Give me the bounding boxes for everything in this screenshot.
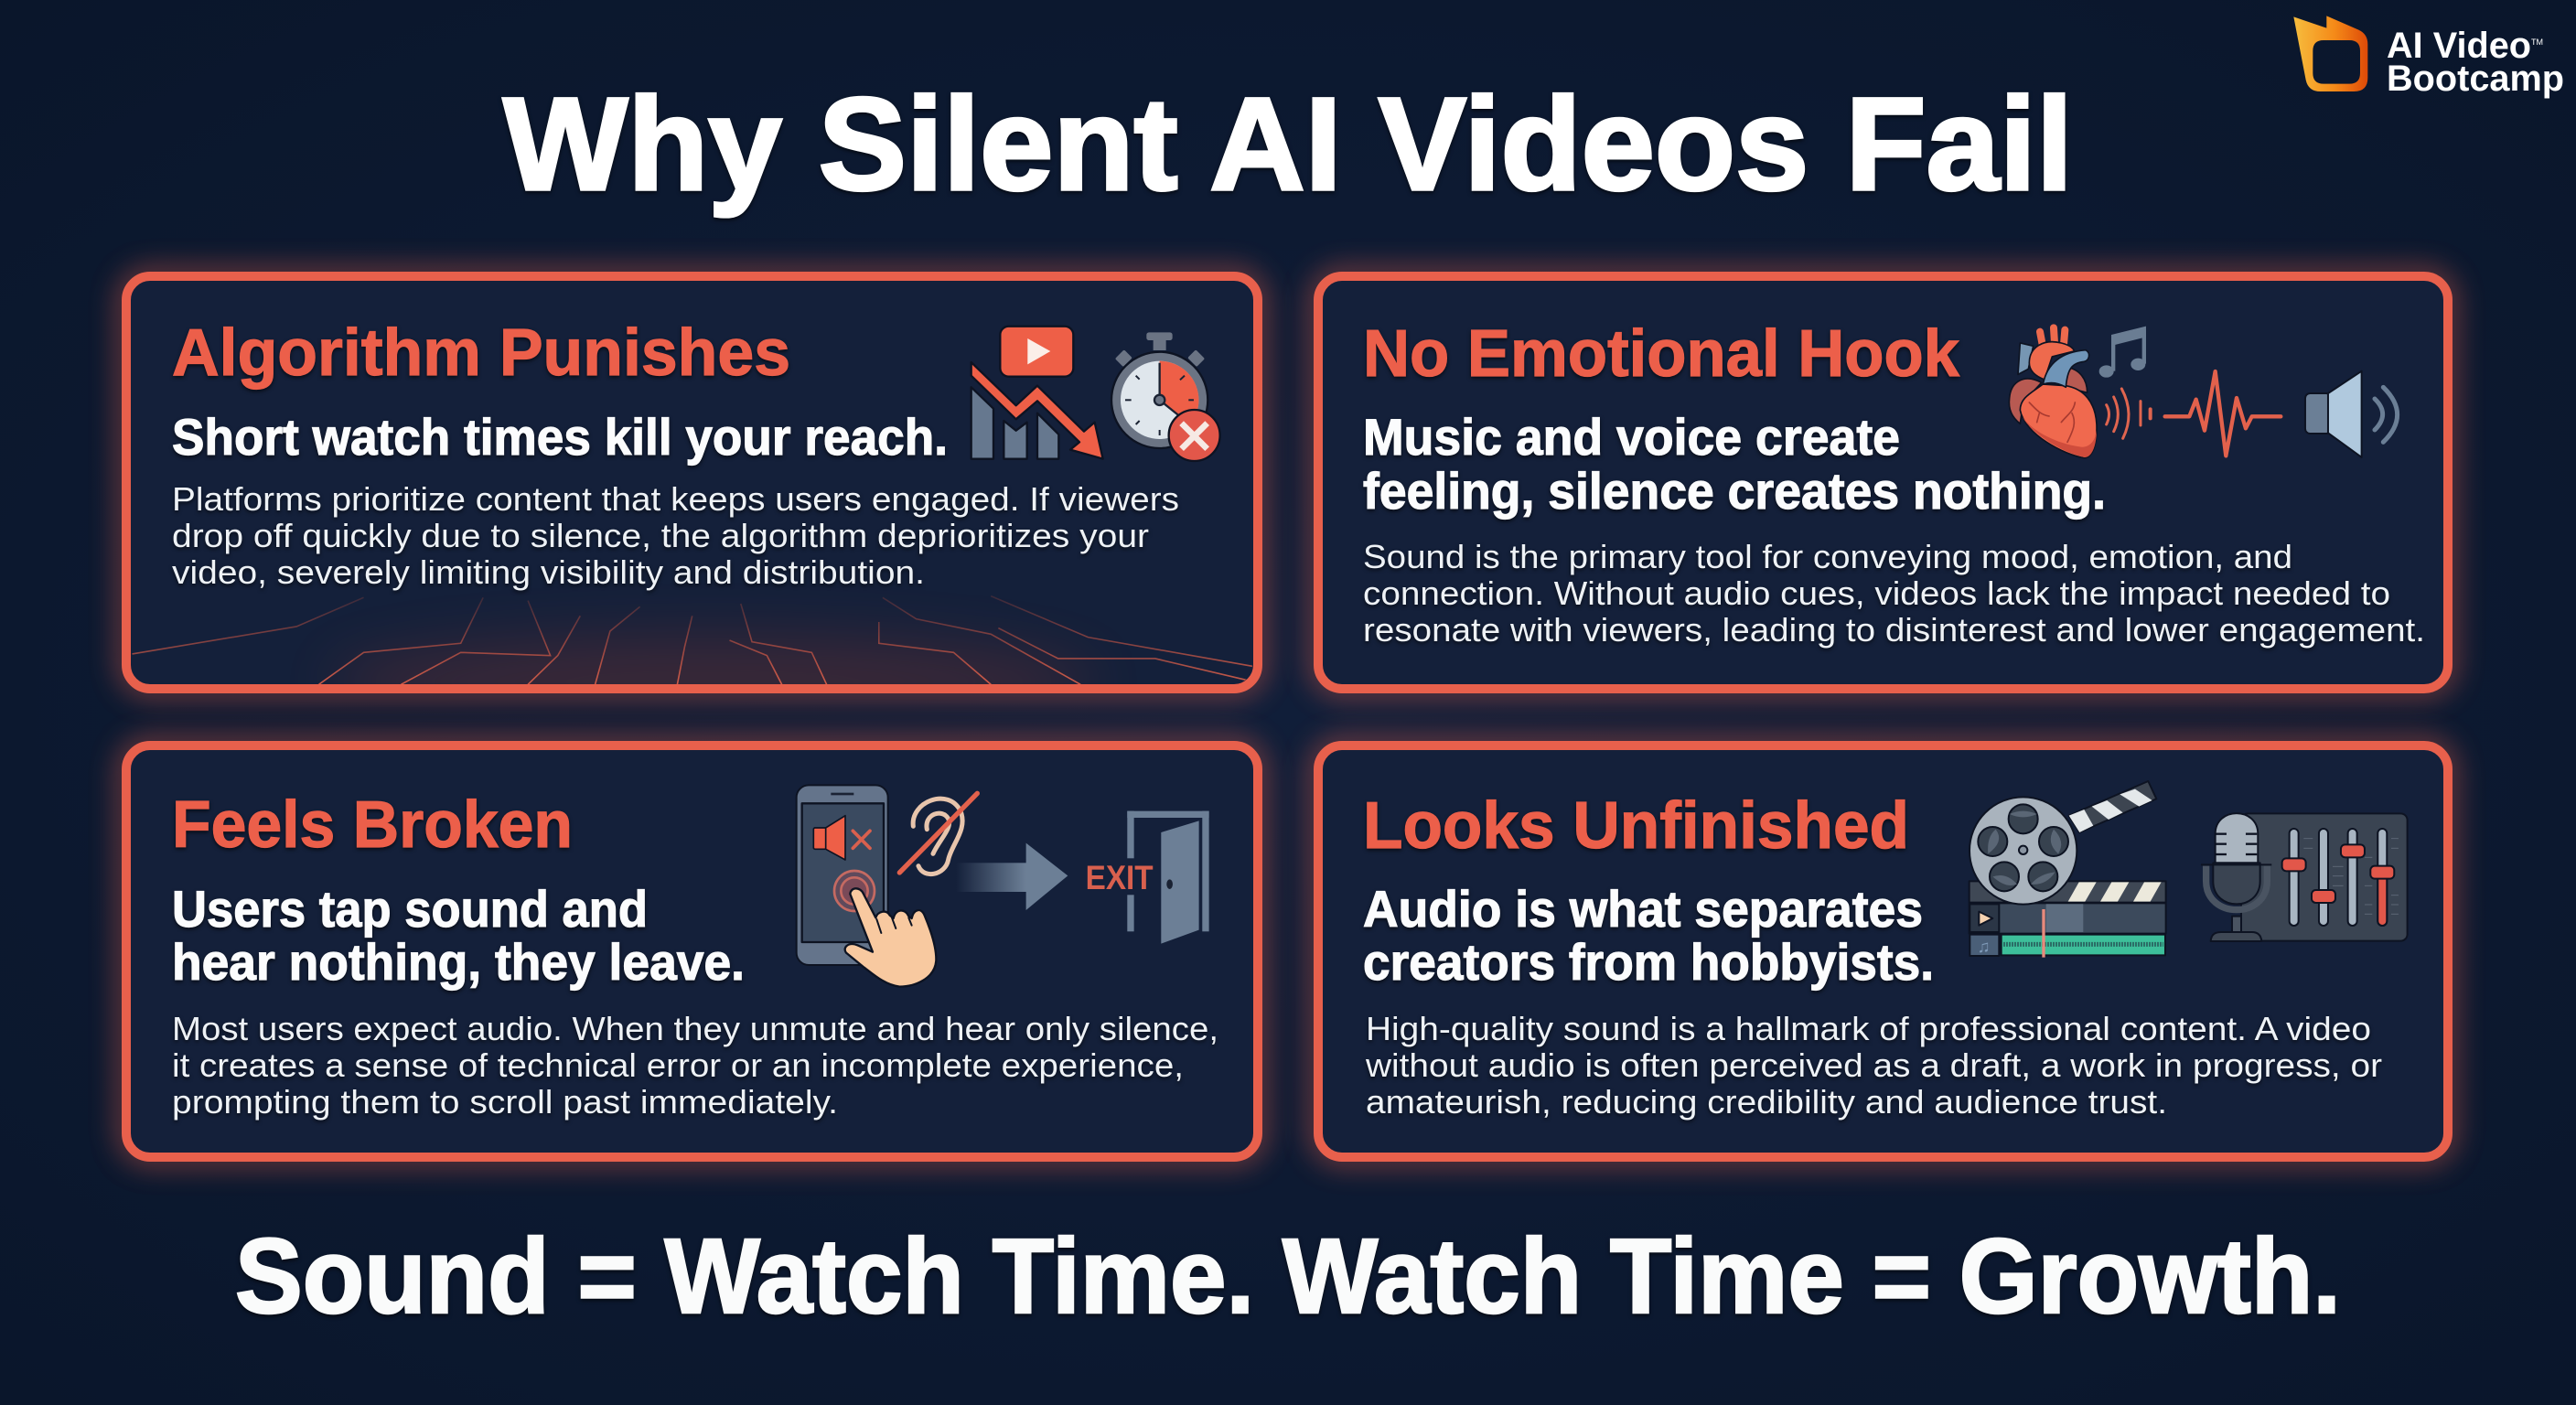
heading: No Emotional Hook — [1363, 317, 1960, 391]
icon: heart, music note, pulse and speaker — [2009, 327, 2398, 458]
title: Why Silent AI Videos Fail — [503, 70, 2073, 218]
subheading: Audio is what separates — [1363, 880, 1923, 938]
body text — [172, 480, 1179, 591]
body text: High-quality sound is a hallmark of professional content. A video — [1366, 1010, 2371, 1047]
body text: without audio is often perceived as a draft, a work in progress, or — [1365, 1046, 2382, 1084]
logo: AI Video Bootcamp — [2293, 16, 2564, 99]
heading: Algorithm Punishes — [172, 316, 790, 390]
logo wordmark: AI Video — [2387, 26, 2531, 66]
subheading: hear nothing, they leave. — [172, 933, 745, 991]
logo wordmark: Bootcamp — [2387, 59, 2564, 99]
body text — [172, 1010, 1218, 1121]
body text — [1363, 538, 2425, 649]
subheading: creators from hobbyists. — [1363, 933, 1934, 991]
subheading — [1363, 880, 1934, 991]
panel: Algorithm Punishes — [126, 276, 1258, 727]
logo wordmark — [2387, 26, 2564, 99]
panel: Feels Broken — [126, 745, 1258, 1157]
heading: Feels Broken — [172, 788, 573, 862]
body text: resonate with viewers, leading to disinterest and lower engagement. — [1363, 611, 2425, 649]
body text — [1365, 1010, 2382, 1121]
closing tagline: Sound = Watch Time. Watch Time = Growth. — [235, 1217, 2341, 1335]
subheading — [172, 880, 745, 991]
icon: film reel, clapper and timeline: ♫ — [1978, 937, 1991, 956]
body text: Platforms prioritize content that keeps users engaged. If viewers — [172, 480, 1179, 518]
body text: Most users expect audio. When they unmute and hear only silence, — [172, 1010, 1218, 1047]
body text: it creates a sense of technical error or an incomplete experience, — [172, 1046, 1184, 1084]
body text: Sound is the primary tool for conveying mood, emotion, and — [1363, 538, 2292, 575]
body text: drop off quickly due to silence, the algorithm deprioritizes your — [172, 517, 1149, 554]
heading: Looks Unfinished — [1363, 789, 1909, 863]
panel: Looks Unfinished — [1318, 745, 2448, 1157]
subheading: Music and voice create — [1363, 408, 1900, 466]
body text: connection. Without audio cues, videos lack the impact needed to — [1363, 574, 2390, 612]
icon: phone tap, muted ear, arrow and exit door — [797, 785, 1209, 987]
subheading — [1363, 408, 2106, 520]
icon: film reel, clapper and timeline — [1970, 781, 2408, 958]
icon: flame screen — [2293, 16, 2367, 91]
panel: No Emotional Hook — [1318, 276, 2448, 689]
exit label: EXIT — [1086, 858, 1154, 896]
body text: prompting them to scroll past immediately. — [172, 1083, 838, 1121]
icon: falling chart, play button and stopwatch — [971, 327, 1220, 461]
subheading: feeling, silence creates nothing. — [1363, 462, 2106, 520]
subheading: Users tap sound and — [172, 880, 648, 938]
body text: video, severely limiting visibility and distribution. — [172, 553, 925, 591]
subheading: Short watch times kill your reach. — [172, 408, 948, 466]
logo wordmark: TM — [2531, 38, 2543, 47]
body text: amateurish, reducing credibility and audience trust. — [1366, 1083, 2167, 1121]
circuit background — [132, 595, 1252, 684]
